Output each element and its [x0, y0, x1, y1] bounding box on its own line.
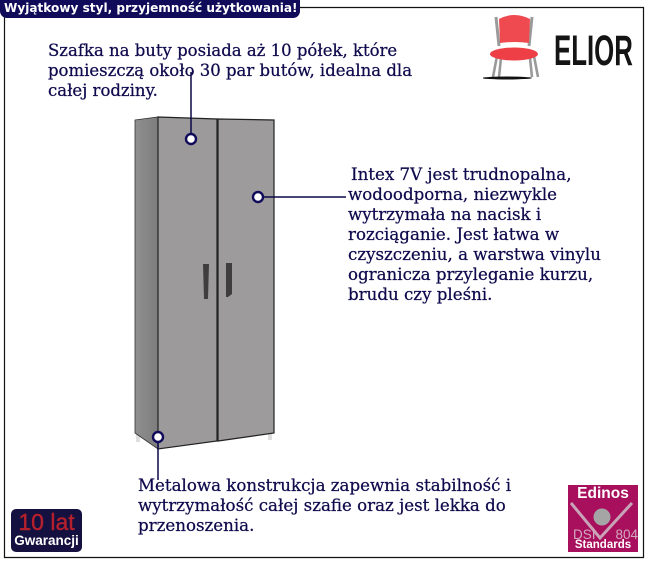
- text: shelves: Szafka na buty posiada aż 10 półek, które: [48, 41, 397, 60]
- right door: [218, 119, 274, 441]
- badge value: 10 lat: [18, 509, 75, 535]
- left door: [158, 117, 217, 449]
- logo: Elior chair: [483, 15, 633, 80]
- text: shelves: pomieszczą około 30 par butów, idealna dla: [48, 61, 412, 80]
- cabinet side panel: [135, 117, 158, 449]
- text: material: wodoodporna, niezwykle: [348, 185, 557, 204]
- left door handle: [203, 264, 209, 299]
- right door handle: [226, 263, 232, 297]
- text: frame: przenoszenia.: [138, 516, 254, 535]
- badge: 10 year warranty: [11, 509, 82, 552]
- text: material: Intex 7V jest trudnopalna,: [351, 165, 572, 184]
- badge label: Standards: [575, 539, 631, 551]
- text: frame: Metalowa konstrukcja zapewnia stabilność i: [138, 476, 511, 495]
- cabinet legs: [136, 433, 272, 442]
- text: material: brudu czy pleśni.: [348, 285, 492, 304]
- badge: Edinos standards: [568, 485, 638, 552]
- product: two-door cabinet: [134, 116, 275, 450]
- badge brand: Edinos: [577, 485, 629, 502]
- text: material: czyszczeniu, a warstwa vinylu: [348, 245, 601, 264]
- leader line: shelves: [186, 72, 196, 144]
- text: material: [348, 165, 601, 304]
- badge code: DSI 804: [573, 527, 638, 542]
- text: shelves: [48, 41, 412, 100]
- logo wordmark: ELIOR: [554, 27, 633, 75]
- icon: red chair: [483, 15, 540, 80]
- text: frame: [138, 476, 511, 535]
- text: material: rozciąganie. Jest łatwa w: [348, 225, 559, 244]
- badge checkmark icon: [570, 502, 633, 540]
- leader line: frame: [153, 432, 163, 480]
- text: frame: wytrzymałość całej szafie oraz jest lekka do: [138, 496, 506, 515]
- text: material: ogranicza przyleganie kurzu,: [348, 265, 593, 284]
- text: shelves: całej rodziny.: [48, 81, 158, 100]
- badge label: Gwarancji: [14, 533, 79, 548]
- text: material: wytrzymała na nacisk i: [348, 205, 541, 224]
- leader line: material: [253, 192, 346, 202]
- heading banner: Wyjątkowy styl, przyjemność użytkowania!: [4, 1, 298, 15]
